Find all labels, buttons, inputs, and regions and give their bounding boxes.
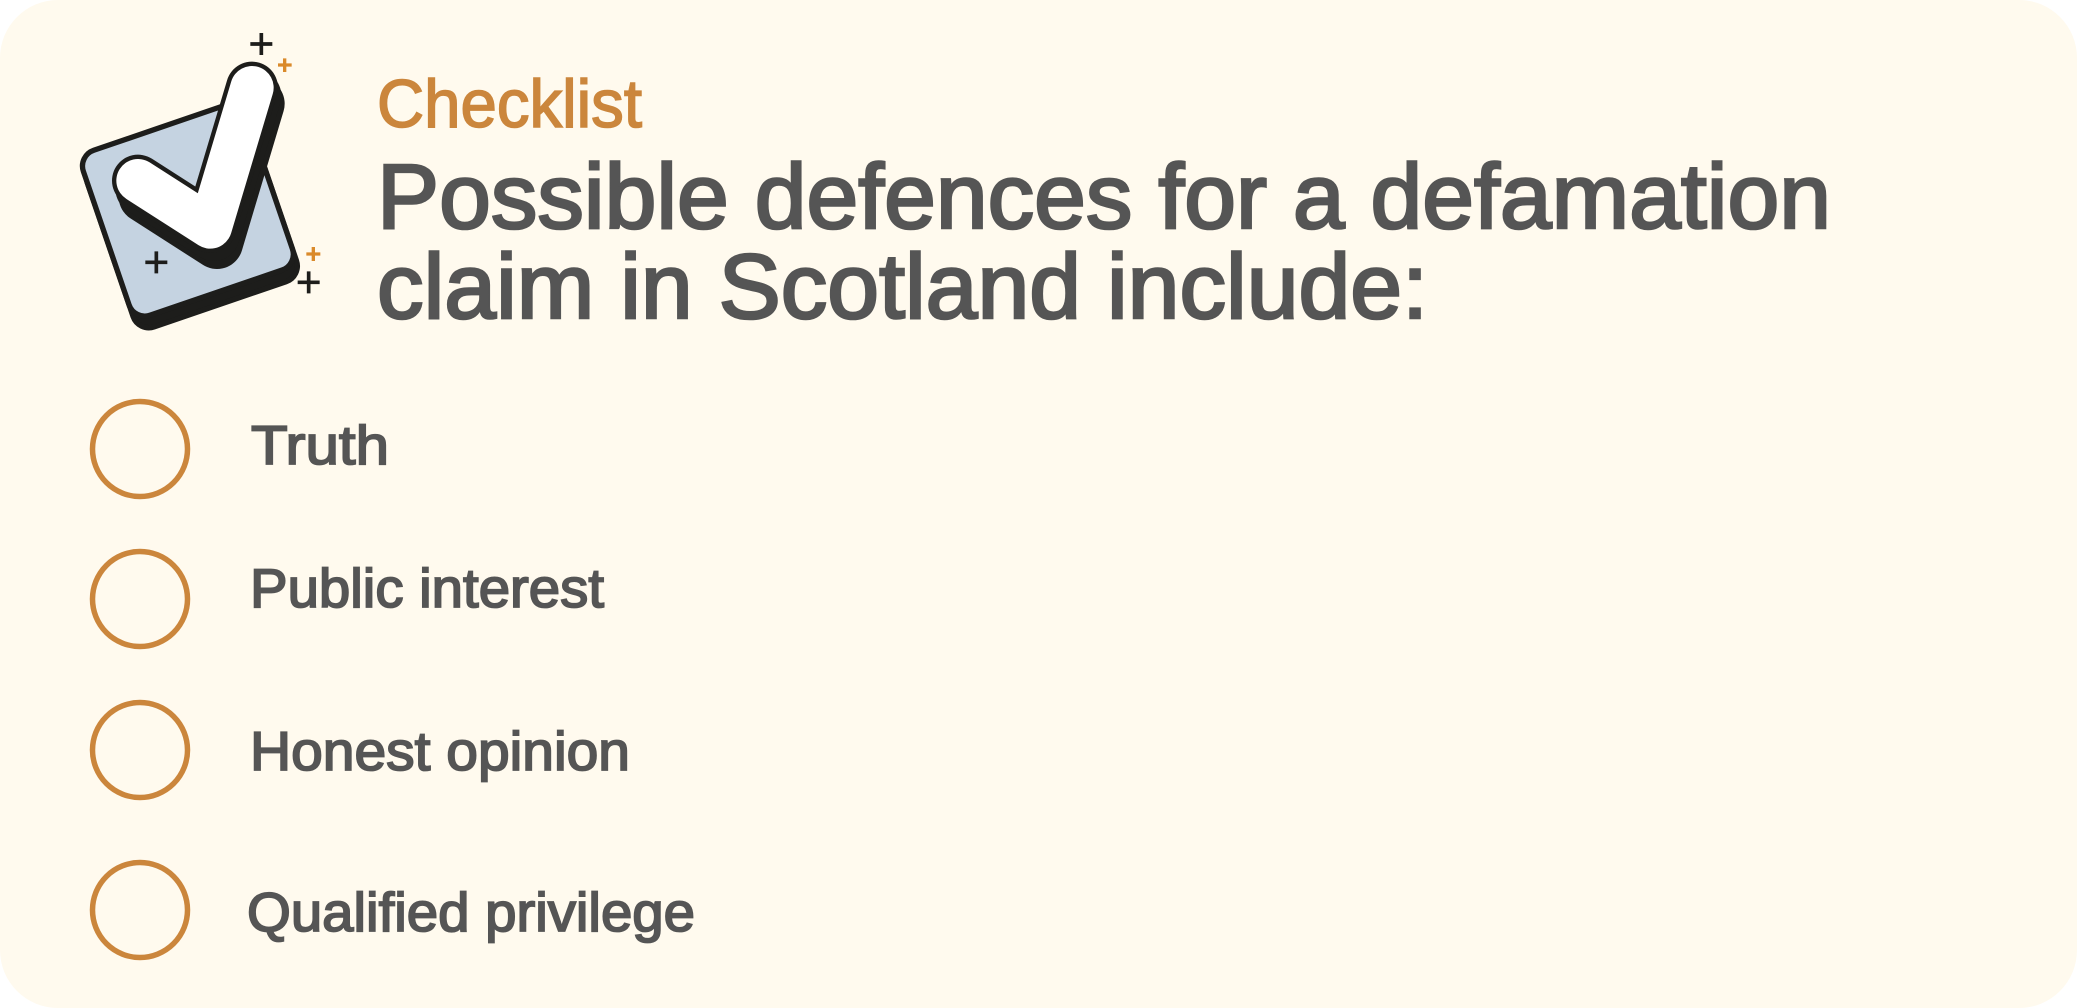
heading: defences title: Possible defences for a defamation <box>377 146 1831 248</box>
checklist item: Truth <box>92 402 389 496</box>
checklist item: Public interest: Public interest <box>250 557 604 619</box>
checklist item: Honest opinion <box>92 702 630 798</box>
icon: ticked checkbox <box>78 33 320 332</box>
checklist item: Public interest <box>92 552 604 646</box>
heading: defences title: claim in Scotland include: <box>377 236 1428 338</box>
checklist item: Qualified privilege <box>92 862 695 958</box>
label: Checklist: Checklist <box>377 66 642 142</box>
heading: defences title <box>377 146 1831 338</box>
checklist item: Truth: Truth <box>251 414 389 476</box>
checklist item: Qualified privilege: Qualified privilege <box>247 881 695 943</box>
checklist item: Honest opinion: Honest opinion <box>250 720 630 782</box>
